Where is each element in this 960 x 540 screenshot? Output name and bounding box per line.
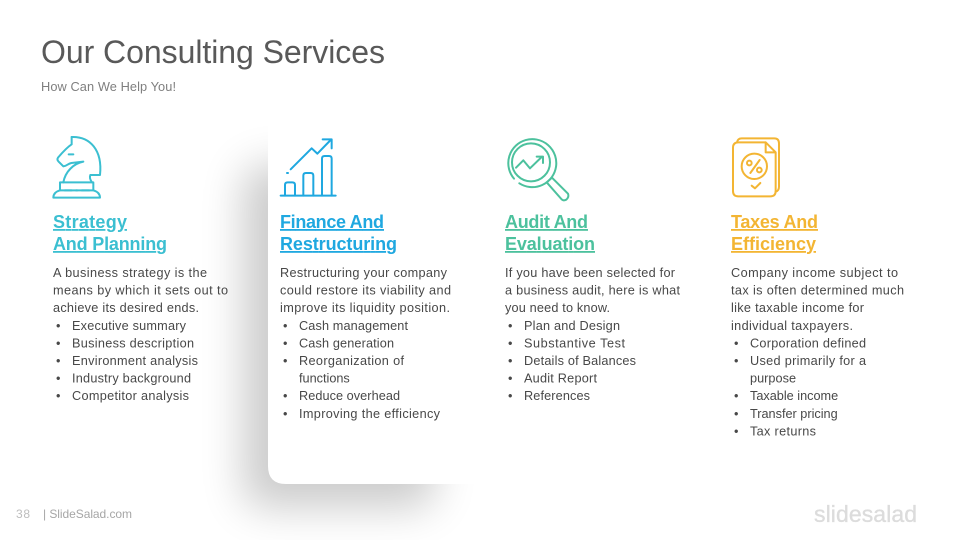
text block: taxes: tax is often determined much xyxy=(731,284,904,298)
title: Our Consulting Services xyxy=(41,34,385,70)
text block: finance xyxy=(280,266,451,421)
heading: strategy and planning xyxy=(53,212,167,254)
heading: taxes and efficiency: Efficiency xyxy=(731,234,816,254)
icon: chess knight xyxy=(53,137,100,198)
text block: audit: • xyxy=(508,372,512,386)
text block: audit: you need to know. xyxy=(505,301,610,315)
text block: finance: Reduce overhead xyxy=(299,389,400,403)
icon: tax document with percent xyxy=(733,138,779,196)
text block: taxes: Corporation defined xyxy=(750,336,866,350)
text block: strategy: • xyxy=(56,354,60,368)
text block: finance: Cash management xyxy=(299,319,408,333)
text block: taxes: • xyxy=(734,354,738,368)
text block: finance: • xyxy=(283,407,287,421)
text block: finance: • xyxy=(283,336,287,350)
subtitle: How Can We Help You! xyxy=(41,79,176,94)
text block: audit: • xyxy=(508,354,512,368)
text block: audit: • xyxy=(508,319,512,333)
text block: strategy: Executive summary xyxy=(72,319,187,333)
text block: taxes: purpose xyxy=(750,372,796,386)
text block: taxes: Used primarily for a xyxy=(750,354,867,368)
text block: strategy: • xyxy=(56,389,60,403)
text block: strategy: • xyxy=(56,372,60,386)
heading: audit and evaluation xyxy=(505,212,595,254)
text block: taxes: • xyxy=(734,424,738,438)
panel: audit and evaluation xyxy=(505,139,680,403)
text block: audit: Substantive Test xyxy=(524,336,625,350)
heading: taxes and efficiency: Taxes And xyxy=(731,212,818,232)
text block: taxes: • xyxy=(734,336,738,350)
heading: finance and restructuring: Finance And xyxy=(280,212,384,232)
icon: rising bar chart xyxy=(281,139,336,196)
text block: strategy: Industry background xyxy=(72,372,191,386)
text block: strategy: Business description xyxy=(72,336,194,350)
text block: audit: References xyxy=(524,389,590,403)
text block: audit: • xyxy=(508,389,512,403)
text block: taxes: • xyxy=(734,407,738,421)
text block: audit xyxy=(505,266,680,403)
heading: strategy and planning: Strategy xyxy=(53,212,127,232)
text block: audit: • xyxy=(508,336,512,350)
text block: audit: Details of Balances xyxy=(524,354,636,368)
text block: taxes xyxy=(731,266,904,438)
text block: taxes: • xyxy=(734,389,738,403)
text block: finance: improve its liquidity position. xyxy=(280,301,450,315)
text block: strategy xyxy=(53,266,228,403)
heading: audit and evaluation: Evaluation xyxy=(505,234,595,254)
text block: strategy: Competitor analysis xyxy=(72,389,189,403)
text block: taxes: Company income subject to xyxy=(731,266,898,280)
text block: finance: • xyxy=(283,319,287,333)
panel: taxes and efficiency xyxy=(731,138,904,438)
text block: strategy: A business strategy is the xyxy=(53,266,207,280)
text block: strategy: means by which it sets out to xyxy=(53,284,228,298)
text block: audit: a business audit, here is what xyxy=(505,284,680,298)
heading: audit and evaluation: Audit And xyxy=(505,212,588,232)
heading: finance and restructuring xyxy=(280,212,397,254)
text block: finance: Reorganization of xyxy=(299,354,404,368)
panel: strategy and planning xyxy=(53,137,228,403)
text block: taxes: like taxable income for xyxy=(731,301,865,315)
text block: strategy: • xyxy=(56,336,60,350)
panel: highlighted card with shadow xyxy=(243,100,510,508)
text block: finance: • xyxy=(283,389,287,403)
text block: finance: Improving the efficiency xyxy=(299,407,441,421)
heading: taxes and efficiency xyxy=(731,212,818,254)
text block: audit: Audit Report xyxy=(524,372,597,386)
icon: magnifying glass with trend line xyxy=(508,139,568,200)
text block: strategy: Environment analysis xyxy=(72,354,198,368)
text block: taxes: individual taxpayers. xyxy=(731,319,853,333)
panel: finance and restructuring xyxy=(280,139,451,421)
text block: taxes: Taxable income xyxy=(750,389,838,403)
text block: taxes: Transfer pricing xyxy=(750,407,838,421)
text block: finance: Restructuring your company xyxy=(280,266,448,280)
text block: audit: If you have been selected for xyxy=(505,266,676,280)
text block: taxes: Tax returns xyxy=(750,424,816,438)
footer page number and site: 38 xyxy=(16,507,30,521)
text block: strategy: • xyxy=(56,319,60,333)
text block: strategy: achieve its desired ends. xyxy=(53,301,199,315)
text block: audit: Plan and Design xyxy=(524,319,620,333)
heading: finance and restructuring: Restructuring xyxy=(280,234,397,254)
text block: finance: • xyxy=(283,354,287,368)
logo: slidesalad: slidesalad xyxy=(814,501,917,527)
heading: strategy and planning: And Planning xyxy=(53,234,167,254)
text block: finance: functions xyxy=(299,372,350,386)
footer page number and site: | SlideSalad.com xyxy=(43,507,132,521)
text block: finance: could restore its viability and xyxy=(280,284,451,298)
text block: finance: Cash generation xyxy=(299,336,394,350)
